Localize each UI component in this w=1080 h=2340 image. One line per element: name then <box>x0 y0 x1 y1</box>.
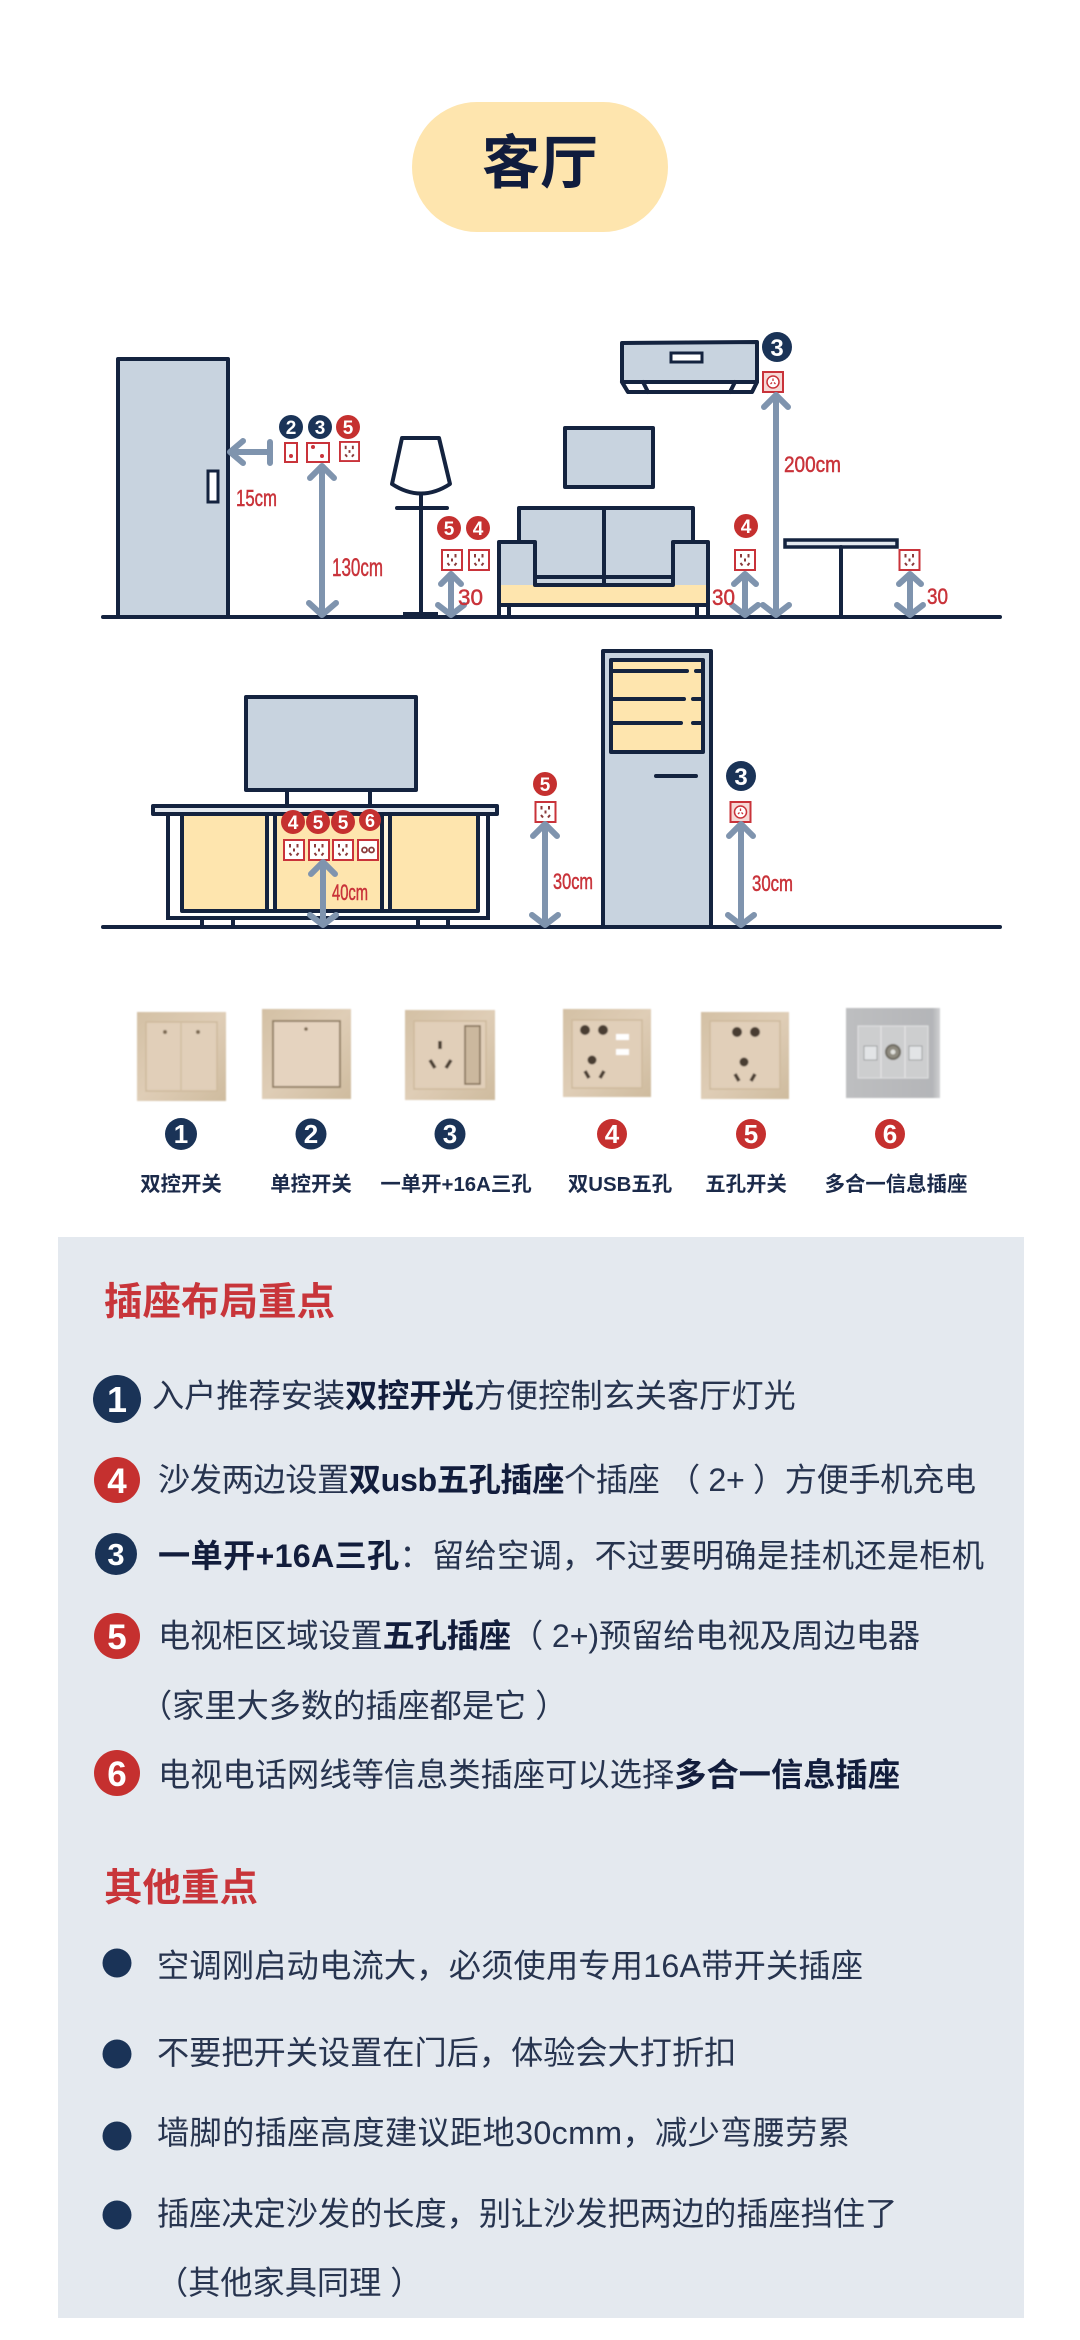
badge and socket right of sofa: 4 <box>741 517 752 538</box>
badges and switches beside door: 3 <box>315 418 325 439</box>
photo: multi-in-one information socket <box>846 1008 940 1098</box>
photo: dual USB five-hole socket <box>563 1009 651 1097</box>
bullet: sofa length: 插座决定沙发的长度，别让沙发把两边的插座挡住了 <box>157 2196 897 2232</box>
badges on console: 5 <box>313 813 324 834</box>
badges and sockets by lamp: 5 <box>444 519 455 540</box>
badge and socket right of sofa <box>734 514 758 570</box>
badges on console: 4 <box>288 813 299 834</box>
point 3: 3 <box>107 1537 125 1572</box>
bullet: sofa length <box>102 2196 897 2301</box>
television <box>246 697 416 806</box>
door <box>118 359 228 617</box>
product labels: 双USB五孔 <box>568 1173 672 1196</box>
arrow: 30 right of sofa <box>732 574 758 615</box>
badge and socket right of tower: 3 <box>734 764 748 791</box>
numbered badges: 1 <box>174 1119 188 1149</box>
label: 30cm right: 30cm <box>752 871 793 896</box>
point 6: 电视电话网线等信息类插座可以选择多合一信息插座 <box>158 1757 900 1793</box>
socket by side table <box>900 550 920 570</box>
photo: double switch <box>137 1012 226 1101</box>
floor lamp <box>392 438 450 617</box>
arrow: 40cm <box>310 862 336 925</box>
title pill <box>412 102 668 232</box>
point 5: 电视柜区域设置五孔插座（ 2+)预留给电视及周边电器 <box>158 1618 920 1654</box>
bullet: air conditioner: 空调刚启动电流大，必须使用专用16A带开关插座 <box>157 1948 863 1984</box>
arrow: 30 by table <box>897 574 923 615</box>
arrow: 30cm right <box>728 824 754 925</box>
badges on console: 6 <box>365 811 375 831</box>
bullet: socket height: 墙脚的插座高度建议距地30cmm，减少弯腰劳累 <box>157 2115 850 2151</box>
product labels: 一单开+16A三孔 <box>380 1173 532 1196</box>
point 1: 1 <box>107 1379 127 1420</box>
product labels: 双控开关 <box>140 1173 222 1196</box>
label: 30 by lamp: 30 <box>458 585 483 610</box>
floor line <box>103 925 1000 929</box>
numbered badges: 2 <box>304 1119 318 1149</box>
heading: socket layout points: 插座布局重点 <box>104 1281 335 1324</box>
label: 30 by table: 30 <box>927 584 948 609</box>
badges and sockets by lamp: 4 <box>473 519 484 540</box>
badge and socket by air conditioner: 3 <box>770 335 784 362</box>
arrow: 30cm left <box>532 824 558 925</box>
point 5: 5 <box>107 1618 127 1657</box>
point 6: 6 <box>107 1755 127 1794</box>
product labels <box>140 1172 967 1196</box>
diagram: sofa wall elevation <box>103 332 1000 617</box>
badges and switches beside door <box>279 415 360 462</box>
air conditioner <box>622 342 757 392</box>
sofa <box>499 508 708 617</box>
label: 40cm: 40cm <box>332 880 368 905</box>
badges on console: 5 <box>338 813 349 834</box>
label: 15cm: 15cm <box>236 485 277 511</box>
sockets on console <box>284 840 378 860</box>
wall picture <box>565 428 653 487</box>
product labels: 单控开关 <box>270 1173 352 1196</box>
label: 200cm: 200cm <box>784 452 841 477</box>
tower air conditioner <box>603 651 711 927</box>
product labels: 多合一信息插座 <box>825 1172 967 1196</box>
badge and socket left of tower: 5 <box>540 775 551 796</box>
panel: key points <box>58 1237 1024 2318</box>
point 1 <box>93 1375 796 1423</box>
badge and socket right of tower <box>726 761 756 822</box>
bullet: sofa length: （其他家具同理 ） <box>156 2265 422 2301</box>
photo: five-hole socket <box>701 1012 789 1099</box>
product labels: 五孔开关 <box>705 1173 787 1196</box>
TV console <box>153 806 497 927</box>
badge and socket by air conditioner <box>762 332 792 392</box>
badges on console <box>281 809 381 834</box>
floor line <box>103 615 1000 619</box>
arrow: 15cm from door <box>230 441 270 463</box>
photo: switched 16A socket <box>405 1010 495 1100</box>
arrow: 30 by lamp <box>438 574 464 615</box>
badge and socket left of tower <box>533 772 557 822</box>
numbered badges: 3 <box>443 1119 457 1149</box>
product row <box>137 1008 967 1196</box>
panel background <box>58 1237 1024 2318</box>
label: 30cm left: 30cm <box>553 869 593 894</box>
point 3: 一单开+16A三孔：留给空调，不过要明确是挂机还是柜机 <box>158 1538 984 1574</box>
numbered badges: 4 <box>605 1119 620 1149</box>
point 1: 入户推荐安装双控开光方便控制玄关客厅灯光 <box>152 1378 796 1414</box>
arrow: 200cm <box>763 395 789 615</box>
point 5: （家里大多数的插座都是它 ） <box>140 1688 567 1724</box>
bullet: switch behind door: 不要把开关设置在门后，体验会大打折扣 <box>157 2035 736 2071</box>
side table <box>785 540 897 617</box>
point 4: 4 <box>107 1462 127 1501</box>
numbered badges: 5 <box>744 1119 758 1149</box>
badges and switches beside door: 5 <box>343 418 354 439</box>
point 4: 沙发两边设置双usb五孔插座个插座 （ 2+ ）方便手机充电 <box>158 1462 976 1498</box>
badges and sockets by lamp <box>437 516 490 570</box>
title pill: 客厅 <box>482 131 598 196</box>
label: 130cm: 130cm <box>332 554 383 582</box>
photo: single switch <box>262 1009 351 1099</box>
badges and switches beside door: 2 <box>286 418 296 439</box>
arrow: 130cm <box>309 466 336 615</box>
heading: other points: 其他重点 <box>104 1867 258 1910</box>
label: 30 right of sofa: 30 <box>712 585 735 610</box>
numbered badges <box>165 1118 905 1150</box>
point 5 <box>94 1613 920 1724</box>
numbered badges: 6 <box>883 1119 897 1149</box>
diagram: TV wall elevation <box>103 651 1000 927</box>
